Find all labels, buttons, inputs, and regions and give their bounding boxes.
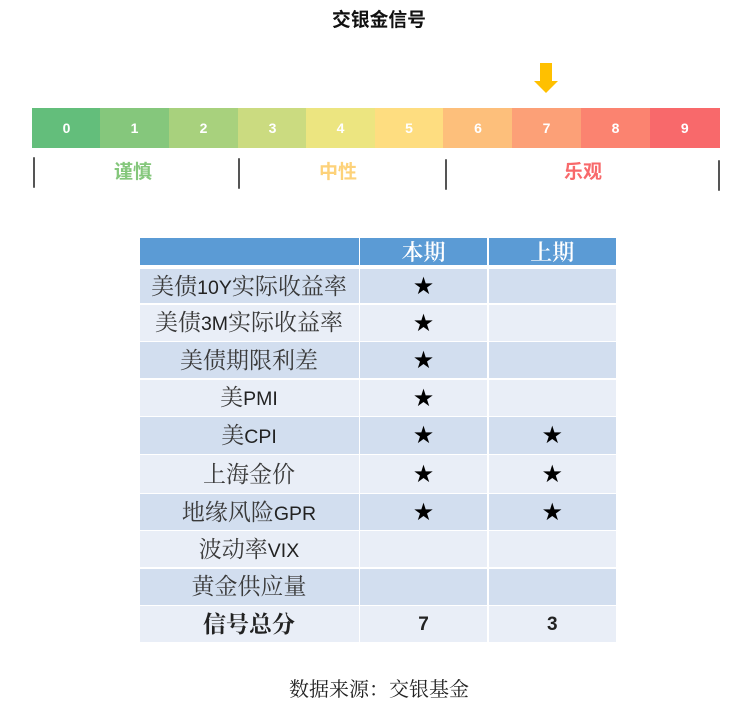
table header: 本期 — [401, 240, 446, 265]
table row: total score — [140, 606, 616, 642]
table header — [140, 238, 616, 265]
table row: CPI: 美CPI — [221, 422, 277, 448]
table row: term spread: ★ — [413, 346, 434, 374]
table row: Shanghai gold — [140, 455, 616, 493]
score scale bar: 1 — [131, 120, 138, 136]
table row: 3M: 美债3M实际收益率 — [155, 309, 343, 335]
score scale bar: 7 — [543, 120, 550, 136]
source note: 数据来源：交银基金 — [289, 673, 469, 702]
title: 交银金信号 — [332, 5, 426, 32]
table row: total score: 3 — [547, 614, 558, 634]
table row: 10Y: 美债10Y实际收益率 — [151, 272, 347, 298]
table row: term spread: 美债期限利差 — [180, 346, 318, 372]
score scale bar: 0 — [63, 120, 70, 136]
table row: GPR — [140, 494, 616, 530]
table row: Shanghai gold: ★ — [413, 460, 434, 488]
table row: GPR: ★ — [541, 498, 563, 526]
table row: 3M — [140, 305, 616, 341]
score scale bar: 9 — [681, 120, 689, 136]
table row: 10Y: ★ — [413, 272, 434, 300]
band label: optimistic: 乐观 — [564, 157, 602, 184]
table row: 3M: ★ — [413, 309, 434, 337]
score scale bar: 8 — [612, 120, 619, 136]
table row: gold supply — [140, 569, 616, 605]
scale range brackets — [33, 157, 720, 191]
table row: Shanghai gold: 上海金价 — [203, 460, 295, 486]
table header: 上期 — [530, 240, 574, 265]
table row: CPI — [140, 417, 616, 454]
score scale bar: 6 — [474, 120, 482, 136]
table row: VIX: 波动率VIX — [199, 536, 299, 562]
icon: arrow pointing at score 7 — [534, 63, 558, 93]
table row: term spread — [140, 342, 616, 378]
signal table — [140, 238, 616, 642]
table row: PMI — [140, 380, 616, 416]
table row: Shanghai gold: ★ — [541, 460, 563, 488]
table row: PMI: ★ — [413, 384, 434, 412]
table row: CPI: ★ — [413, 421, 434, 449]
score scale bar: 3 — [269, 120, 276, 136]
score scale bar — [32, 108, 720, 148]
table row: VIX — [140, 531, 616, 567]
score scale bar: 2 — [200, 120, 207, 136]
table row: 10Y — [140, 269, 616, 303]
band label: cautious: 谨慎 — [114, 157, 152, 184]
table row: gold supply: 黄金供应量 — [192, 573, 306, 599]
band label: neutral: 中性 — [319, 157, 357, 184]
table row: GPR: ★ — [413, 498, 434, 526]
table row: GPR: 地缘风险GPR — [182, 498, 316, 524]
score scale bar: 4 — [337, 120, 344, 136]
table row: PMI: 美PMI — [220, 384, 278, 410]
table row: CPI: ★ — [541, 421, 563, 449]
table row: total score: 7 — [418, 614, 429, 634]
score scale bar: 5 — [405, 120, 413, 136]
table row: total score: 信号总分 — [203, 610, 295, 636]
